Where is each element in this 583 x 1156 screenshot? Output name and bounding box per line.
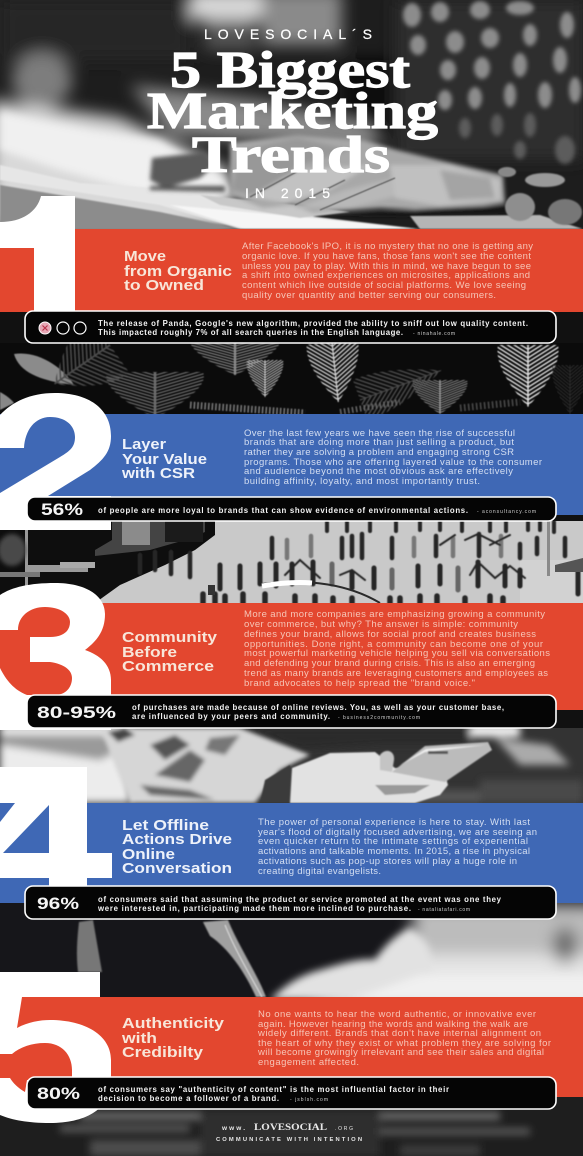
section 5 heading: Authenticity — [122, 1016, 225, 1032]
plaid sleeve — [100, 728, 310, 803]
polka dots — [403, 1, 581, 164]
callout: section 5 stat: decision to become a follower of a brand. — [98, 1094, 279, 1103]
section 1 heading: Move — [124, 249, 166, 265]
callout: section 4 stat — [25, 886, 556, 919]
section 3 body text — [244, 609, 550, 689]
callout: section 1 stat — [25, 311, 556, 343]
section 4 body text: activations and talkable moments. In 2015, a rise in physical — [258, 846, 530, 857]
callout: section 4 stat: of consumers said that assuming the product or service promoted at the event was one they — [98, 895, 502, 904]
hand — [290, 751, 448, 803]
section 1 heading — [124, 249, 232, 294]
section 1 body text: organic love. If you have fans, those fans won't see the content — [242, 251, 531, 262]
section 5 body text: the heart of why they exist or what problem they are solving for — [258, 1038, 551, 1049]
photo: crowd holding hands — [0, 521, 583, 604]
title block — [147, 26, 438, 201]
section 5 heading: with — [121, 1031, 157, 1047]
callout: section 2 stat: of people are more loyal to brands that can show evidence of environmental actions. — [98, 506, 468, 515]
photo: fern leaves — [0, 344, 583, 414]
section 4 body text — [258, 817, 537, 877]
callout: section 3 stat: 80-95% — [37, 704, 116, 722]
phone — [392, 742, 492, 782]
section 2 body text: and audience beyond the most obvious ask are effectively — [244, 466, 513, 477]
section 4 body text: activations such as pop-up stores will play a huge role in — [258, 856, 517, 867]
main title: Trends — [192, 127, 390, 184]
section 1 body text: a shift into owned experiences on microsites, applications and — [242, 270, 530, 281]
footer: .ORG — [335, 1126, 353, 1132]
section 4 heading: Conversation — [122, 861, 232, 877]
callout: section 3 stat — [27, 695, 556, 728]
callout: section 1 stat: The release of Panda, Google's new algorithm, provided the ability to sniff out low quality content. — [98, 319, 528, 328]
callout: section 3 stat: of purchases are made because of online reviews. You, as well as your customer base, — [132, 703, 504, 712]
section 1 body text: quality over quantity and better serving our consumers. — [242, 290, 496, 301]
callout: section 1 stat: - ninahale.com — [413, 331, 455, 337]
section 2 body text: brands that are doing more than just selling a product, but — [244, 437, 514, 448]
numeral 1 — [0, 196, 75, 312]
section 1 body text: content which live outside of social platforms. We love seeing — [242, 280, 526, 291]
panel: section 2 blue band — [0, 414, 583, 515]
section 2 heading: Your Value — [122, 452, 207, 468]
section 5 body text: widely different. Brands that don't have internal alignment on — [257, 1028, 541, 1039]
section 2 body text: building affinity, loyalty, and most importantly trust. — [244, 476, 480, 487]
section 5 body text: again. However hearing the words and walking the walk are — [258, 1019, 528, 1030]
section 5 body text: will become growingly irrelevant and see their sales and digital — [257, 1047, 544, 1058]
section 3 body text: and defending your brand during crisis. This is also an emerging — [244, 658, 535, 669]
section 2 body text — [244, 428, 542, 487]
callout: section 2 stat: 56% — [41, 501, 83, 519]
section 5 body text — [257, 1009, 551, 1068]
section 2 body text: rather they are solving a problem and engaging strong CSR — [244, 447, 514, 458]
section 1 heading: from Organic — [124, 264, 232, 280]
section 4 body text: even quicker return to the intimate settings of experiential — [258, 836, 528, 847]
section 3 body text: More and more companies are emphasizing growing a community — [244, 609, 545, 620]
section 5 heading — [121, 1016, 225, 1061]
section 3 heading: Commerce — [122, 659, 214, 675]
numeral 5 — [0, 972, 111, 1123]
callout: section 1 stat: This impacted roughly 7% of all search queries in the English language. — [98, 328, 403, 337]
section 2 heading: Layer — [122, 437, 166, 453]
callout: section 3 stat: - business2community.com — [338, 715, 420, 721]
eyebrow: LoveSocial's: LOVESOCIAL´S — [204, 26, 372, 42]
panel: section 5 red band — [0, 997, 583, 1097]
section 1 body text — [242, 241, 533, 301]
footer: www. — [221, 1125, 245, 1132]
section 3 body text: defines your brand, allows for social proof and creates business — [244, 629, 536, 640]
photo: hair and clouds — [0, 903, 583, 997]
section 4 body text: year's flood of digitally focused advertising, we are seeing an — [258, 827, 537, 838]
callout: section 5 stat: 80% — [37, 1085, 80, 1103]
section 3 body text: brand advocates to help spread the "brand voice." — [244, 678, 475, 689]
panel: section 4 blue band — [0, 803, 583, 903]
callout: section 2 stat: - aconsultancy.com — [477, 509, 536, 515]
section 2 heading — [121, 437, 207, 482]
section 1 body text: unless you pay to play. With this in mind, we have begun to see — [242, 261, 531, 272]
section 3 body text: over commerce, but why? The answer is simple: community — [244, 619, 518, 630]
section 3 heading: Before — [122, 645, 177, 661]
section 4 heading — [122, 818, 232, 877]
callout: section 5 stat: of consumers say "authenticity of content" is the most influential factor in their — [98, 1085, 449, 1094]
subtitle year: IN 2015 — [245, 185, 330, 201]
table edge — [410, 215, 583, 229]
callout: section 3 stat: are influenced by your peers and community. — [132, 712, 330, 721]
footer: COMMUNICATE WITH INTENTION — [216, 1137, 362, 1143]
footer — [216, 1123, 362, 1143]
callout: section 4 stat: - nataliatafari.com — [418, 907, 470, 913]
section 4 body text: creating digital evangelists. — [258, 866, 381, 877]
callout: section 4 stat: were interested in, participating made them more inclined to purchase. — [97, 904, 411, 913]
figures — [140, 522, 578, 604]
photo: blurred footer background — [0, 1097, 583, 1156]
section 4 heading: Let Offline — [122, 818, 209, 834]
section 5 body text: No one wants to hear the word authentic, or innovative ever — [258, 1009, 536, 1020]
main title: 5 Biggest — [170, 42, 411, 99]
panel: section 1 red band — [0, 229, 583, 312]
section 3 heading — [122, 630, 218, 675]
numeral 4 — [0, 767, 112, 890]
section 3 body text: most powerful marketing vehicle helping you sell via conversations — [244, 648, 550, 659]
numeral 2 — [0, 393, 111, 530]
section 5 body text: engagement affected. — [258, 1057, 359, 1068]
section 1 body text: After Facebook's IPO, it is no mystery that no one is getting any — [242, 241, 533, 252]
icon: pale leaf — [14, 353, 74, 385]
footer: LOVESOCIAL — [254, 1123, 327, 1133]
main title: Marketing — [147, 83, 438, 140]
section 5 heading: Credibilty — [122, 1045, 204, 1061]
icon: three circles with x — [39, 322, 86, 334]
panel: section 3 red band — [0, 603, 583, 710]
callout: section 4 stat: 96% — [37, 895, 79, 913]
hands — [150, 135, 520, 216]
numeral 3 — [0, 583, 111, 730]
section 3 body text: opportunities. Done right, a community can become one of your — [244, 639, 543, 650]
section 4 heading: Actions Drive — [122, 832, 232, 848]
section 3 body text: trend as many brands are leveraging customers and employees as — [244, 668, 548, 679]
section 2 body text: programs. Those who are offering layered value to the consumer — [244, 457, 542, 468]
section 4 heading: Online — [122, 847, 175, 863]
main title — [147, 42, 438, 184]
callout: section 5 stat — [27, 1077, 556, 1109]
building and trees — [0, 521, 215, 603]
callout: section 5 stat: - jsblsh.com — [290, 1097, 328, 1103]
section 3 heading: Community — [122, 630, 218, 646]
callout: section 2 stat — [27, 497, 556, 521]
section 2 body text: Over the last few years we have seen the rise of successful — [244, 428, 515, 439]
section 1 heading: to Owned — [124, 278, 204, 294]
section 2 heading: with CSR — [121, 466, 196, 482]
photo: hands typing on keyboard — [0, 0, 583, 229]
photo: hand holding smartphone — [0, 725, 583, 803]
section 4 body text: The power of personal experience is here to stay. With last — [258, 817, 530, 828]
keyboard — [0, 112, 235, 195]
